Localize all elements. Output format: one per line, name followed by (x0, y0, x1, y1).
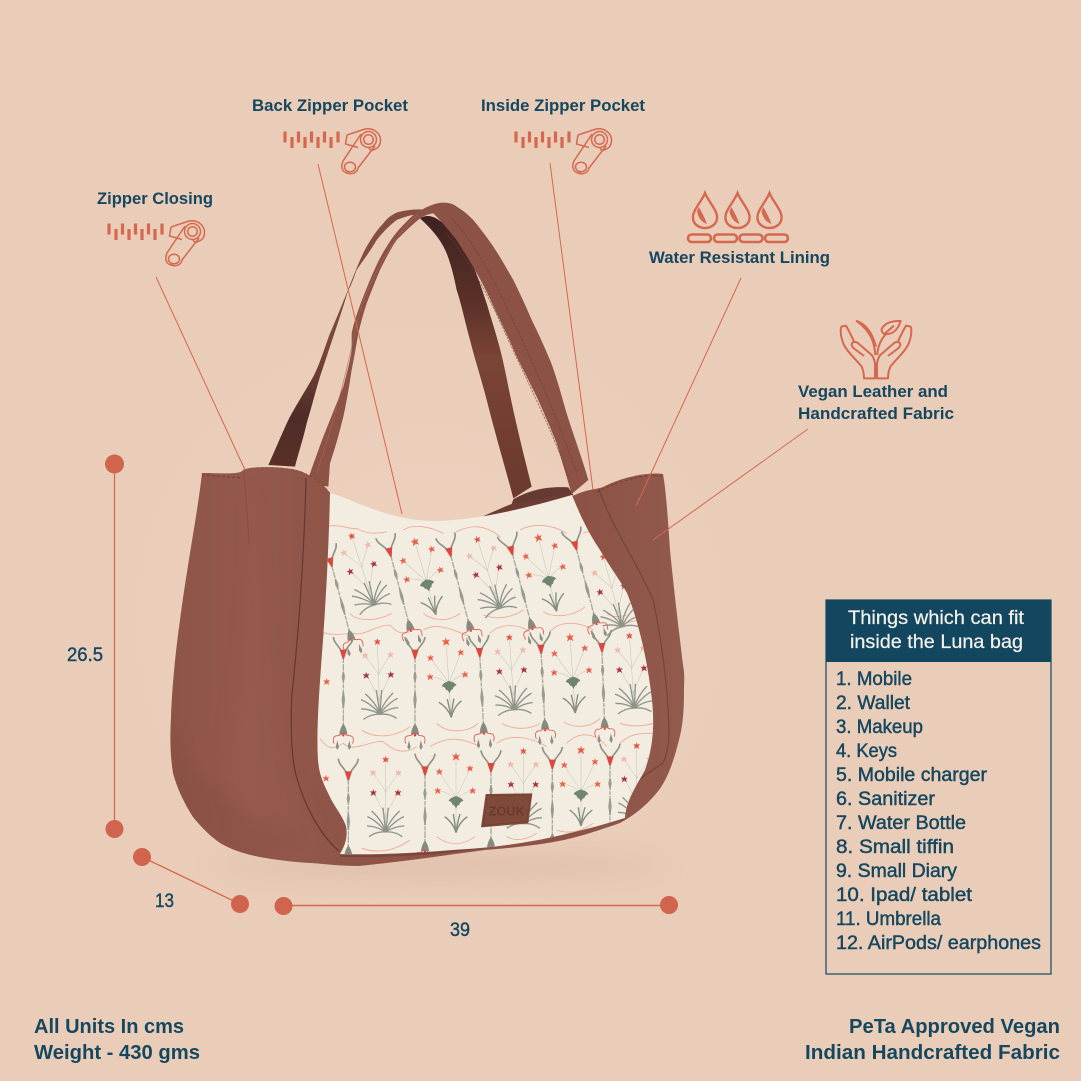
item list: 10. Ipad/ tablet (836, 884, 973, 906)
panel header (826, 600, 1051, 662)
label: zipper closing: Zipper Closing (97, 189, 213, 208)
footer: certifications: Indian Handcrafted Fabric (805, 1041, 1060, 1064)
icon: hands and leaves (841, 321, 911, 378)
leader line: back zipper pocket (318, 164, 402, 514)
bag body (170, 467, 684, 866)
item list: 6. Sanitizer (836, 788, 935, 810)
icon: closing zipper (109, 221, 205, 266)
bag fabric panel (317, 493, 654, 854)
item list: 5. Mobile charger (836, 764, 987, 786)
item list: 1. Mobile (836, 668, 912, 690)
item list: 11. Umbrella (836, 908, 941, 930)
item list: 3. Makeup (836, 716, 923, 738)
icon: inside zipper (516, 129, 612, 174)
label: inside zipper pocket: Inside Zipper Pocket (481, 96, 645, 115)
dimension: height (67, 454, 124, 838)
dimension: depth (133, 848, 249, 913)
back handle (268, 209, 573, 523)
fabric scallop lines (320, 525, 653, 851)
label: water resistant lining: Water Resistant Lining (649, 248, 830, 267)
fabric row one (376, 533, 424, 647)
fabric row three (338, 759, 358, 872)
label: vegan leather and handcrafted fabric: Handcrafted Fabric (798, 404, 954, 423)
dimension: depth: 13 (155, 891, 174, 912)
panel: things which fit (826, 600, 1051, 974)
shadow under bag (210, 855, 670, 877)
label patch: ZOUK (489, 805, 525, 819)
footer: units and weight (34, 1015, 200, 1064)
item list: 8. Small tiffin (836, 836, 954, 858)
leader line: water resistant lining (636, 278, 741, 506)
footer: units and weight: All Units In cms (34, 1015, 184, 1038)
footer: certifications (805, 1015, 1060, 1064)
leader line: inside zipper pocket (550, 163, 593, 490)
fabric row two (333, 637, 353, 750)
icon: back zipper (285, 129, 381, 174)
panel header: inside the Luna bag (850, 631, 1023, 653)
leader line: zipper closing (156, 277, 245, 470)
panel header: Things which can fit (848, 607, 1025, 629)
leader line: vegan leather (653, 429, 808, 540)
footer: units and weight: Weight - 430 gms (34, 1041, 200, 1064)
label patch (481, 793, 532, 827)
item list (836, 668, 1041, 954)
label: vegan leather and handcrafted fabric: Vegan Leather and (798, 382, 948, 401)
item list: 7. Water Bottle (836, 812, 966, 834)
label: back zipper pocket: Back Zipper Pocket (252, 96, 408, 115)
item list: 4. Keys (836, 740, 897, 762)
icon: water drops (688, 193, 788, 242)
panel: bag illustration (165, 203, 684, 877)
footer: certifications: PeTa Approved Vegan (849, 1015, 1060, 1038)
item list: 2. Wallet (836, 692, 911, 714)
bag shading and pleats (165, 467, 669, 870)
front handle (308, 203, 588, 494)
dimension: width (274, 896, 678, 941)
item list: 9. Small Diary (836, 860, 957, 882)
item list: 12. AirPods/ earphones (836, 932, 1041, 954)
label: vegan leather and handcrafted fabric (798, 382, 954, 423)
dimension: height: 26.5 (67, 645, 103, 666)
dimension: width: 39 (450, 920, 470, 941)
